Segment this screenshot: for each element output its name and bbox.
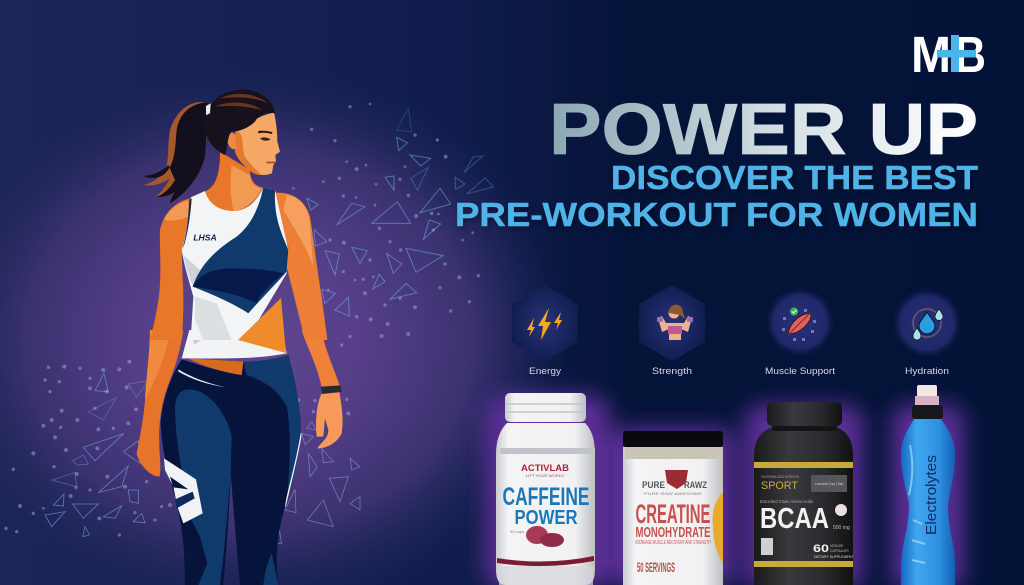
label: strength: Strength [652,366,692,377]
leg stripes [164,458,203,523]
left arm [150,198,190,340]
lower body [137,330,343,585]
icon: strength [639,285,705,361]
product: caffeine power [496,393,595,585]
product: caffeine power: 90 caps [510,529,524,534]
label: muscle support: Muscle Support [765,366,835,377]
midriff [188,358,243,375]
subtitle: discover the best: DISCOVER THE BEST [611,159,978,196]
product: caffeine power: POWER [514,507,578,529]
product: creatine monohydrate: INCREASE MUSCLE RECOVERY AND STRENGTH [636,540,711,546]
subtitle: pre-workout for women: PRE-WORKOUT FOR WOMEN [455,196,978,233]
face [235,113,280,175]
product: bcaa: Branched Chain Amino Acids [760,499,814,504]
product: bcaa: SPORT [761,480,798,492]
label: energy: Energy [529,366,561,377]
neck [205,152,263,212]
icon: hydration [891,287,963,359]
right forearm and hand [302,330,340,387]
icon: energy [512,285,578,361]
tank top orange panel [238,298,286,353]
product: bcaa [754,402,854,585]
product: bcaa: Leucine | Iso | Val [815,482,843,486]
product: creatine monohydrate: PURE [642,480,665,490]
product: caffeine power: CAFFEINE [502,483,590,511]
ear [226,132,237,149]
product: electrolytes bottle [901,385,955,585]
particle field: triangles and dots [4,103,493,543]
product: bcaa: VEGGIE [830,544,844,548]
product: electrolytes bottle: Electrolytes [923,455,940,535]
woman figure [137,89,343,585]
tank top navy [193,187,288,313]
label: hydration: Hydration [905,366,949,377]
tank top white [182,187,288,340]
product: bcaa: CALIFORNIA GOLD NUTRITION [761,475,799,479]
hair tie [206,103,211,115]
logo [911,26,986,83]
logo: B [955,26,986,83]
logo: M [911,26,951,83]
right arm [275,193,327,340]
left forearm [137,330,183,477]
hair top [205,89,275,155]
brand mark: LHSA [193,233,217,243]
product: creatine monohydrate: MONOHYDRATE [636,524,710,541]
upper body [143,89,327,340]
product glow [485,395,964,585]
product: creatine monohydrate: PURE RAW AWESOME [644,492,703,496]
product: bcaa: DIETARY SUPPLEMENT [814,555,854,559]
title: power up: POWER UP [549,90,978,170]
product: creatine monohydrate: CREATINE [636,499,710,529]
ponytail [143,102,208,203]
product: bcaa: 500 mg [833,525,850,531]
product: bcaa: BCAA [760,503,829,535]
product: creatine monohydrate: RAWZ [684,480,707,490]
icon: muscle support [764,286,836,358]
product: creatine monohydrate: 50 SERVINGS [637,559,675,575]
product: bcaa: 60 [813,543,829,555]
product: caffeine power: LIFT YOUR WORLD [526,474,565,478]
product: bcaa: CAPSULES [830,549,849,553]
top hem [182,330,287,359]
product: caffeine power: ACTIVLAB [521,463,570,473]
product: creatine monohydrate [623,431,723,585]
